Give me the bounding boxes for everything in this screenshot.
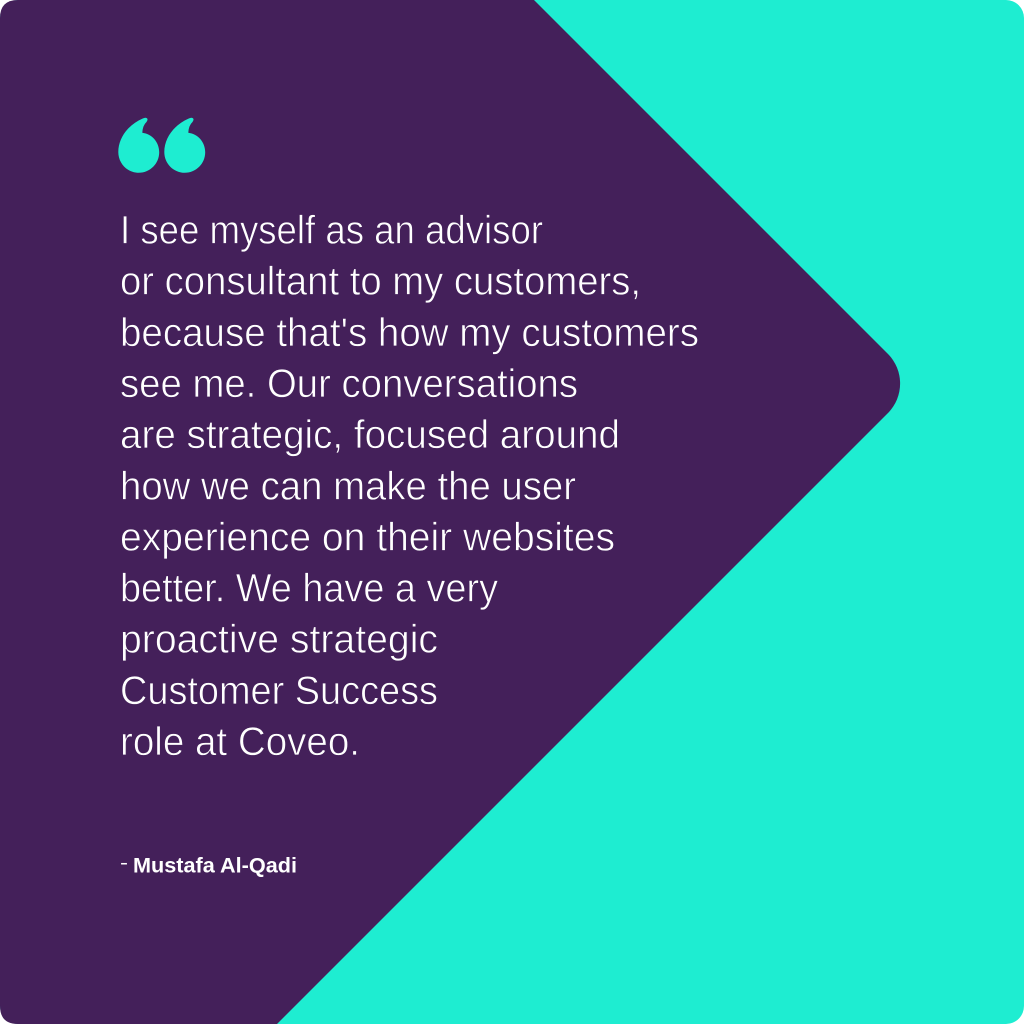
quote text: are strategic, focused around <box>120 413 620 457</box>
quote text: or consultant to my customers, <box>120 260 641 304</box>
quote text: experience on their websites <box>120 515 615 559</box>
quote text: proactive strategic <box>120 618 438 662</box>
quote text: better. We have a very <box>120 566 498 610</box>
icon: quotation marks <box>118 118 205 173</box>
quote text: I see myself as an advisor <box>120 208 543 252</box>
quote text: see me. Our conversations <box>120 362 578 406</box>
quote text: how we can make the user <box>120 464 576 508</box>
quote text: role at Coveo. <box>120 720 360 764</box>
quote text: because that's how my customers <box>120 311 699 355</box>
attribution: Mustafa Al-Qadi <box>133 854 297 877</box>
quote text: Customer Success <box>120 669 438 713</box>
quote text <box>120 208 699 764</box>
attribution: - <box>120 853 128 874</box>
